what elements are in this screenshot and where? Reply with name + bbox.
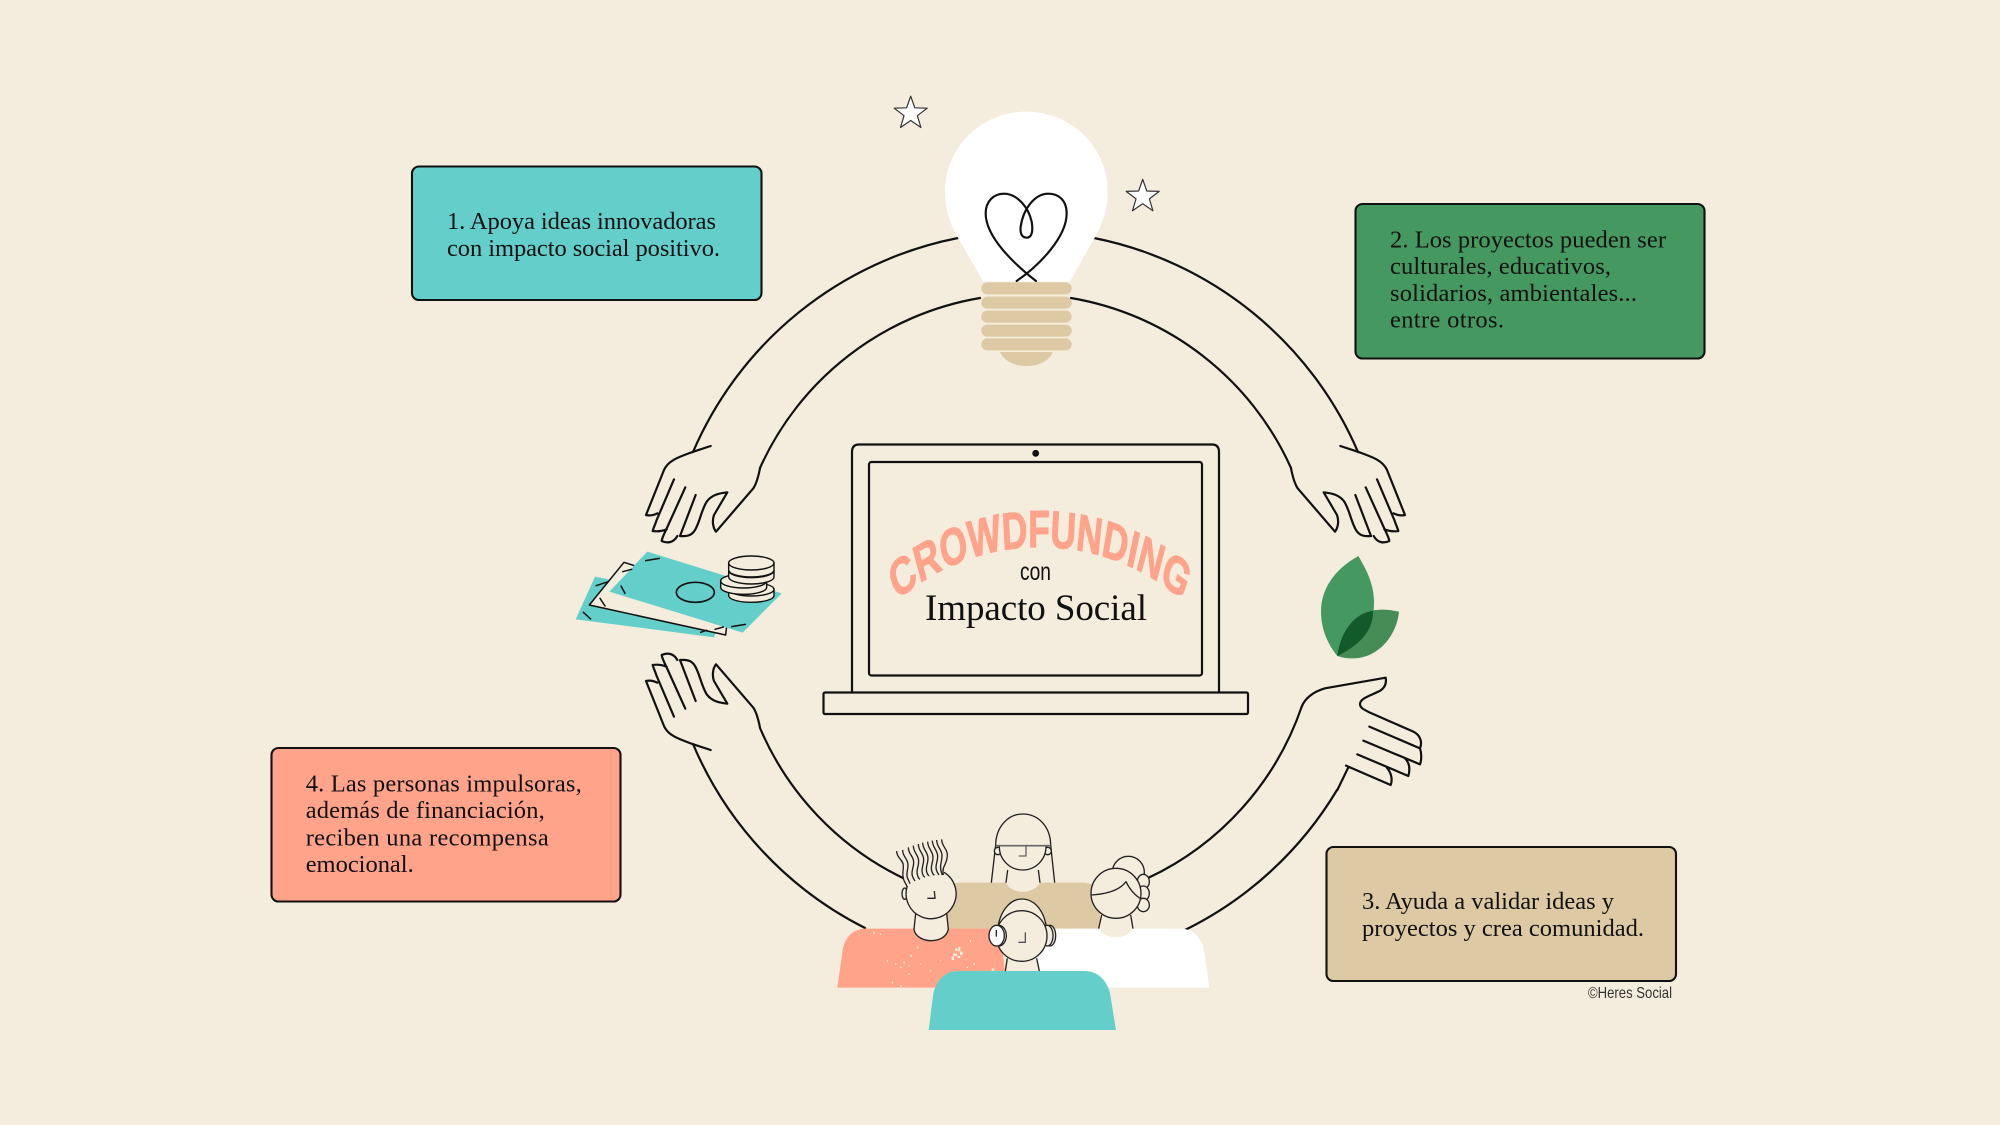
icon: light bulb with heart filament: [945, 112, 1108, 366]
panel: step 2: culturales, educativos,: [1390, 253, 1611, 280]
panel: step 2: entre otros.: [1390, 307, 1504, 334]
coral shirt: [837, 929, 1007, 988]
icon: star right: [1126, 179, 1159, 211]
panel: step 2: [1356, 204, 1704, 358]
circular arms connecting the stages: [693, 238, 1358, 930]
laptop: [822, 443, 1250, 716]
panel: step 4: [272, 748, 620, 902]
panel: step 2: solidarios, ambientales...: [1390, 280, 1637, 307]
panel: step 1: [412, 166, 762, 300]
tan shirt: back person: [947, 883, 1100, 929]
teal shirt: front person: [929, 971, 1116, 1030]
icon: star left: [894, 96, 927, 127]
panel: step 2: 2. Los proyectos pueden ser: [1390, 226, 1666, 253]
icon: hand bottom right: [1302, 678, 1421, 790]
subtitle: impacto social: Impacto Social: [925, 588, 1147, 629]
coin stack: [721, 556, 774, 602]
panel: step 4: 4. Las personas impulsoras,: [306, 771, 582, 798]
panel: step 1: con impacto social positivo.: [447, 235, 720, 262]
person: right with bun: [1091, 856, 1149, 937]
panel: step 3: 3. Ayuda a validar ideas y: [1362, 888, 1615, 915]
title: crowdfunding arc: CROWDFUNDING: [890, 510, 1190, 595]
people group: [837, 814, 1209, 1030]
panel: step 3: [1326, 847, 1676, 981]
icon: green leaves: [1321, 556, 1399, 658]
icon: hand bottom left: [646, 654, 760, 750]
white shirt: [1033, 929, 1209, 988]
icon: hand top right: [1291, 446, 1405, 542]
person: front with headphones: [989, 899, 1056, 971]
person: back with long hair: [991, 814, 1055, 892]
subtitle: con: con: [1020, 558, 1051, 586]
panel: step 4: además de financiación,: [306, 797, 545, 824]
panel: step 3: proyectos y crea comunidad.: [1362, 915, 1644, 942]
panel: step 1: 1. Apoya ideas innovadoras: [447, 208, 716, 235]
person: left with wavy hair: [897, 839, 956, 941]
panel: step 4: reciben una recompensa: [306, 824, 549, 851]
panel: step 4: emocional.: [306, 851, 414, 878]
icon: hand top left: [646, 446, 760, 542]
icon: money bills and coins: [576, 552, 782, 637]
credit: ©Heres Social: [1588, 985, 1672, 1002]
